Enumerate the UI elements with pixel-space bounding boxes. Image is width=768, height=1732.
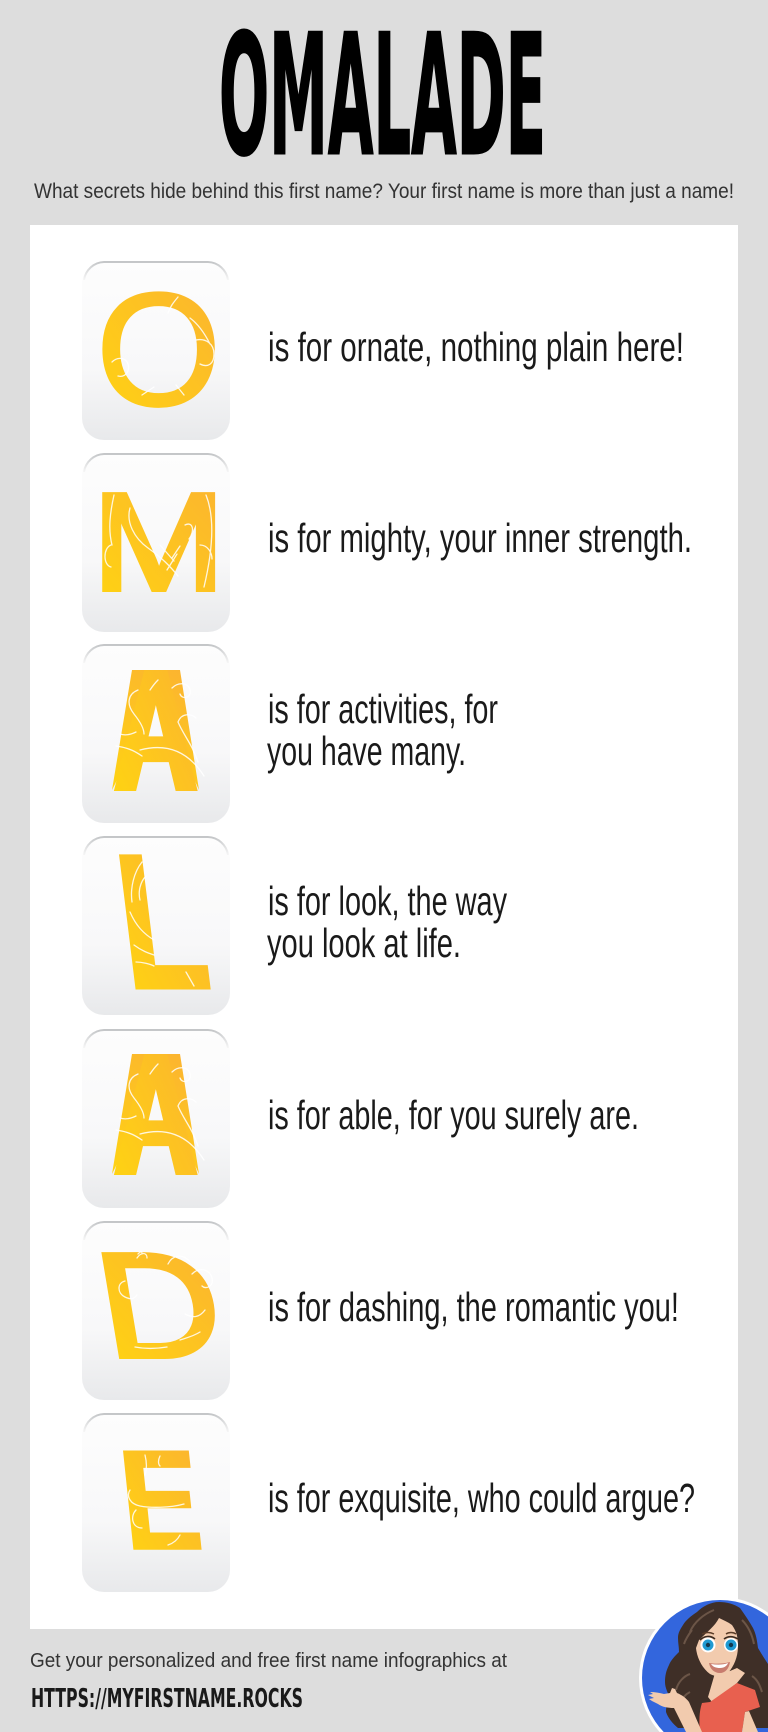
row: letter A: A [115,1022,197,1206]
text: L line: is for look, the way [268,878,507,924]
row: letter L [82,814,507,1029]
text: A line 2: you have many. [267,728,466,774]
icon: cartoon woman avatar [639,1597,768,1732]
text: A line: is for activities, for [268,686,498,732]
text: L line 2: you look at life. [267,920,461,966]
row: letter E [82,1414,695,1592]
decorative shoulders of the second ornate A [112,1054,199,1174]
row: letter O: O [96,260,221,440]
row: letter D [82,1222,679,1400]
row: letter L: L [106,814,219,1029]
row: letter A [82,638,498,823]
row: letter E: E [112,1421,209,1579]
row: letter M: M [92,465,225,619]
row: letter D: D [86,1223,233,1388]
row: letter M [82,454,692,632]
decorative shoulders of the ornate A [112,670,199,790]
panel: letters list [30,225,738,1629]
row: letter A: A [115,638,197,822]
row: letter A [82,1022,639,1208]
footer text: Get your personalized and free first name infographics at [30,1650,507,1672]
footer url: HTTPS://MYFIRSTNAME.ROCKS [31,1684,303,1714]
row: letter O [82,260,684,440]
